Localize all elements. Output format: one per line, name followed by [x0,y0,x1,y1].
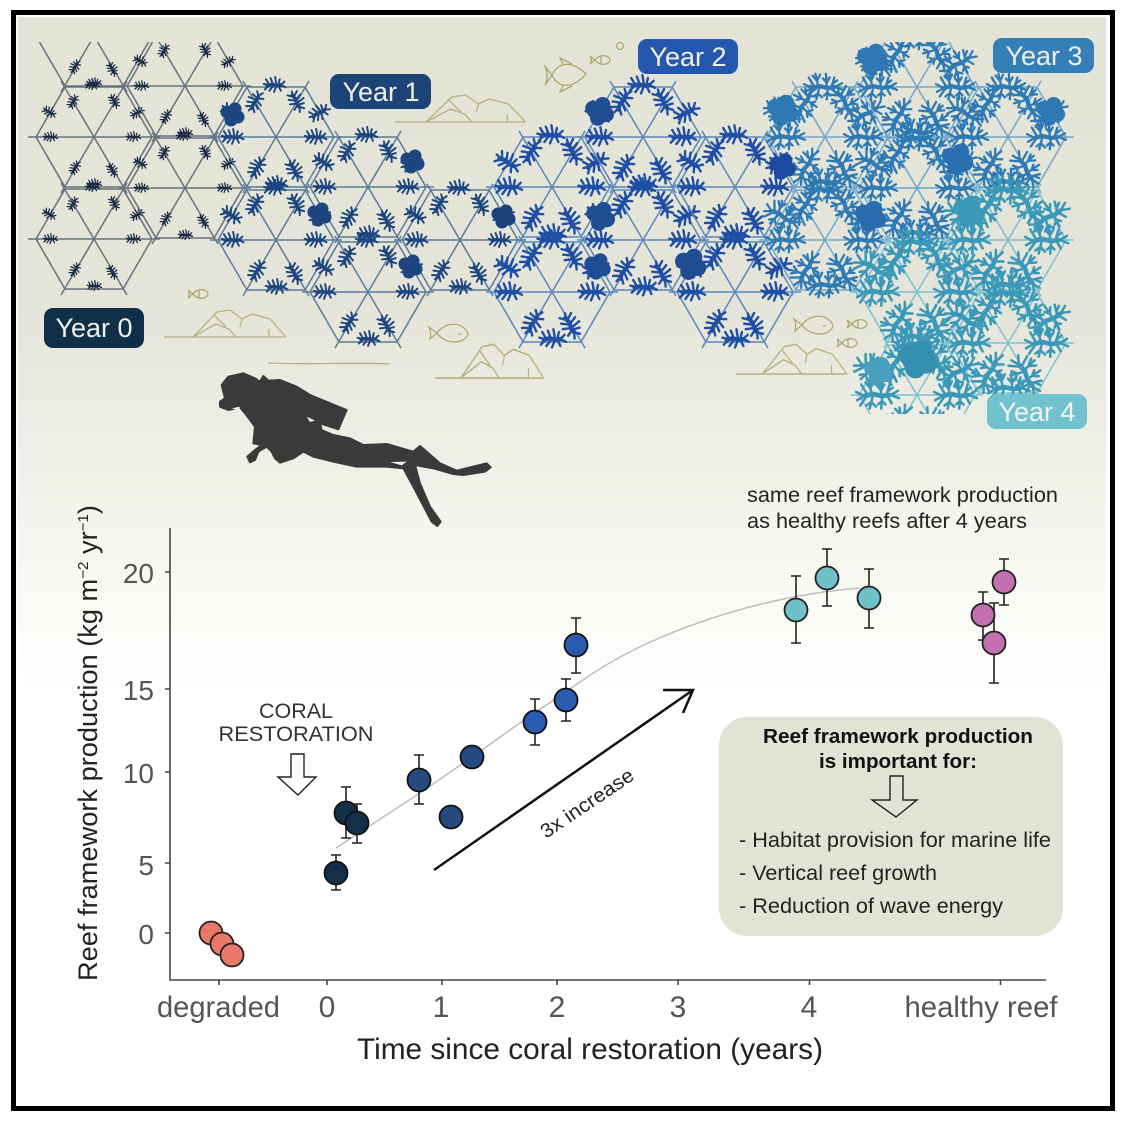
data points: degraded [200,922,244,966]
label: Year 3: Year 3 [1005,41,1083,71]
benefit list: - Reduction of wave energy [739,895,1004,918]
annotation: same as healthy reefs: as healthy reefs after 4 years [747,510,1027,533]
y axis tick labels: 15 [123,675,154,706]
y axis title: ) [73,505,103,514]
label: Year 4: Year 4 [998,397,1076,427]
y axis title: Reef framework production (kg m [73,582,103,981]
panel: importance of reef framework production [719,717,1063,936]
label: Year 0: Year 0 [55,313,133,343]
y axis tick labels: 5 [138,850,154,881]
label: Year 2 [638,39,738,74]
arrow: down to restoration start [278,754,316,795]
x axis tick labels [157,991,1058,1024]
arrow: 3x increase [434,690,693,870]
boulder corals [220,44,1065,386]
y axis tick labels: 10 [123,758,154,789]
label: Year 1 [330,74,431,109]
reef year 2 hexagons [486,75,801,348]
x axis tick labels: 1 [433,991,449,1024]
label: Year 3 [993,38,1094,73]
sea gradient background [18,17,1106,700]
x axis tick labels: 4 [801,991,817,1024]
x axis tick labels: degraded [157,991,280,1024]
panel: reef restoration illustration [28,42,1074,414]
data points: healthy reef [972,570,1016,654]
rock outline left [164,310,286,337]
x axis tick labels: 3 [670,991,686,1024]
rock outline lower centre [435,344,544,378]
annotation: same as healthy reefs: same reef framework production [747,484,1058,507]
x axis title: Time since coral restoration (years) [357,1033,823,1066]
reef year 0 hexagons [28,42,251,296]
reef year 4 hexagons [851,174,1074,414]
annotation: same as healthy reefs [747,484,1058,533]
arrow: down [872,776,917,817]
benefit list: - Habitat provision for marine life [739,829,1051,852]
label: Year 4 [987,394,1087,429]
data points: year 0 [324,802,368,884]
seabed line [268,363,390,364]
fish group [188,42,867,347]
annotation: 3x increase: 3x increase [536,765,638,843]
chart: reef framework production over time [73,505,1058,1066]
panel heading: Reef framework production [763,725,1033,748]
data points: year 2 [524,634,588,734]
axes [165,528,1046,985]
rock outline top centre [395,95,526,122]
label: Year 1: Year 1 [342,77,420,107]
benefit list [739,829,1051,918]
rock outline right [736,344,847,374]
reef year 1 hexagons [210,77,526,348]
x axis tick labels: 0 [319,991,335,1024]
reef year 3 hexagons [759,24,1074,297]
y axis title: −2 [75,562,92,579]
y axis title: −1 [75,514,92,531]
label: Year 2: Year 2 [649,42,727,72]
error bars [331,549,1009,890]
y axis tick labels [123,558,154,950]
data points: year 1 [408,746,484,828]
label: Year 0 [44,308,144,348]
y axis tick labels: 20 [123,558,154,589]
x axis tick labels: healthy reef [904,991,1058,1024]
trend curve [336,588,860,848]
callout: coral restoration [218,700,374,746]
y axis tick labels: 0 [138,919,154,950]
panel heading: is important for: [819,750,977,773]
callout: coral restoration: RESTORATION [218,723,374,746]
x axis tick labels: 2 [549,991,565,1024]
icon: scuba diver silhouette [220,373,491,526]
panel heading [763,725,1033,773]
callout: coral restoration: CORAL [259,700,333,723]
y axis title: yr [73,531,103,562]
benefit list: - Vertical reef growth [739,862,937,885]
data points: year 4 [784,566,880,622]
